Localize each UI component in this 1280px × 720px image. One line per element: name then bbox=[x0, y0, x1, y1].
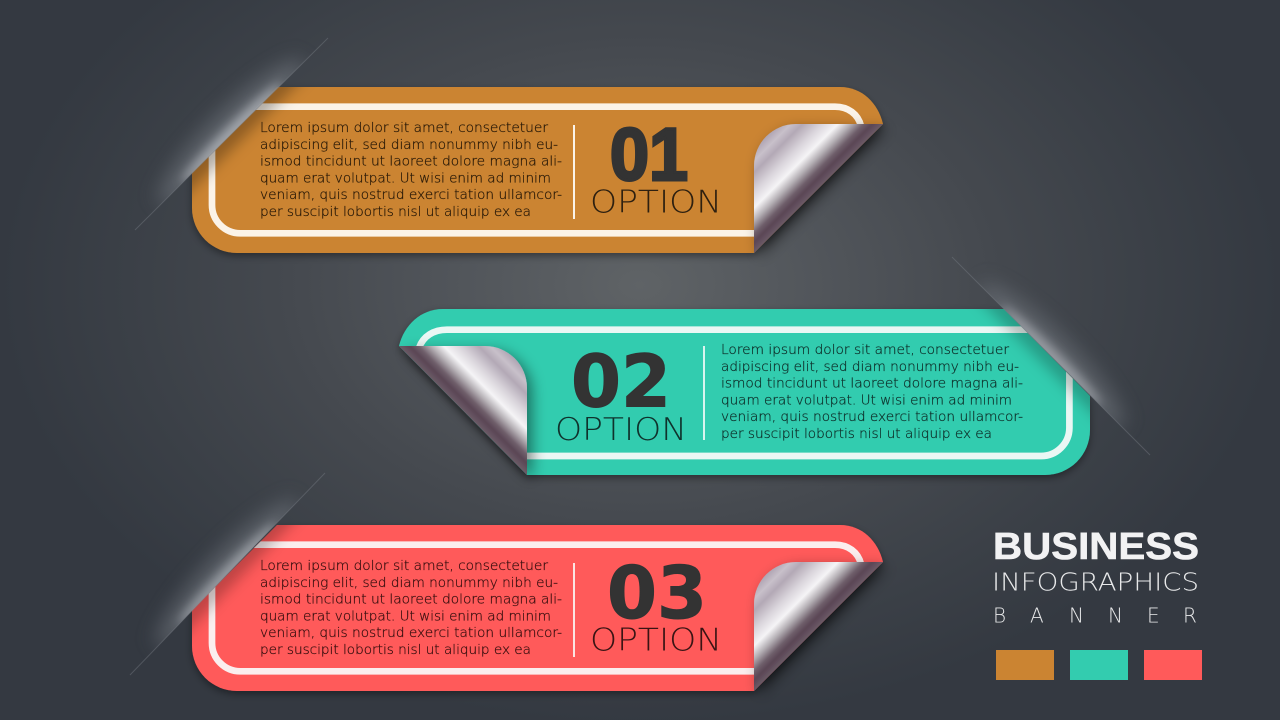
banner 1: orange bbox=[135, 38, 883, 253]
banner 2 body text: adipiscing elit, sed diam nonummy nibh eu- bbox=[721, 360, 1019, 375]
banner 3 option label: OPTION bbox=[590, 623, 722, 659]
banner 1 divider bbox=[573, 125, 575, 219]
banner 2 divider bbox=[703, 346, 705, 440]
banner 3 white frame line bbox=[212, 545, 861, 671]
title: business: BUSINESS bbox=[993, 526, 1199, 568]
banner 3 number: 03 bbox=[607, 551, 707, 635]
banner 3 body bbox=[192, 525, 883, 691]
banner 3 body text: adipiscing elit, sed diam nonummy nibh eu- bbox=[260, 576, 558, 591]
banner 3: red bbox=[130, 473, 883, 691]
banner 1 slit shadow bbox=[192, 87, 304, 199]
banner 2 body text: quam erat volutpat. Ut wisi enim ad minim bbox=[721, 393, 1012, 408]
banner 3 body text: ismod tincidunt ut laoreet dolore magna ali- bbox=[260, 592, 562, 608]
banner 2 body text: veniam, quis nostrud exerci tation ullamcor- bbox=[721, 410, 1023, 425]
banner 1 body text: Lorem ipsum dolor sit amet, consectetuer bbox=[260, 121, 549, 136]
banner 3 page curl bbox=[754, 562, 883, 691]
banner 1 body text: ismod tincidunt ut laoreet dolore magna ali- bbox=[260, 154, 562, 170]
banner 3 body text: quam erat volutpat. Ut wisi enim ad minim bbox=[260, 609, 551, 624]
swatch: teal bbox=[1070, 650, 1128, 680]
banner 3 slit highlight bbox=[130, 473, 325, 675]
banner 2 white frame line bbox=[419, 330, 1069, 456]
banner 2 body text: ismod tincidunt ut laoreet dolore magna ali- bbox=[721, 376, 1023, 392]
swatch: red bbox=[1144, 650, 1202, 680]
banner 1 body text: veniam, quis nostrud exerci tation ullamcor- bbox=[260, 188, 562, 203]
banner 2 body text bbox=[721, 343, 1023, 442]
banner 2 number: 02 bbox=[571, 340, 671, 424]
banner 1 body text bbox=[260, 121, 562, 220]
banner 1 body bbox=[192, 87, 883, 253]
banner 1 body text: per suscipit lobortis nisl ut aliquip ex ea bbox=[260, 205, 531, 220]
banner 1 white frame line bbox=[212, 107, 861, 233]
banner 3 body text: per suscipit lobortis nisl ut aliquip ex ea bbox=[260, 643, 531, 658]
banner 2 body bbox=[399, 309, 1090, 475]
title block bbox=[992, 526, 1199, 628]
banner 3 body text bbox=[260, 559, 562, 658]
banner 1 body text: quam erat volutpat. Ut wisi enim ad minim bbox=[260, 171, 551, 186]
banner 3 body text: veniam, quis nostrud exerci tation ullamcor- bbox=[260, 626, 562, 641]
banner 2 slit highlight bbox=[952, 257, 1150, 455]
colour legend bbox=[996, 650, 1202, 680]
banner 2 slit shadow bbox=[980, 309, 1090, 419]
banner 2 body text: per suscipit lobortis nisl ut aliquip ex ea bbox=[721, 427, 992, 442]
banner 2 page curl bbox=[399, 346, 527, 475]
banner 3 slit shadow bbox=[192, 525, 300, 638]
banner 3 divider bbox=[573, 563, 575, 657]
banner 1 number: 01 bbox=[610, 113, 688, 196]
banner 2 body text: Lorem ipsum dolor sit amet, consectetuer bbox=[721, 343, 1010, 358]
banner 1 slit highlight bbox=[135, 38, 328, 230]
banner 1 page curl bbox=[754, 124, 883, 253]
banner 1 body text: adipiscing elit, sed diam nonummy nibh eu- bbox=[260, 138, 558, 153]
banner 1 option label: OPTION bbox=[590, 185, 722, 221]
title: banner: BANNER bbox=[993, 604, 1197, 628]
banner 3 body text: Lorem ipsum dolor sit amet, consectetuer bbox=[260, 559, 549, 574]
banner 2: teal bbox=[399, 257, 1150, 475]
banner 2 option label: OPTION bbox=[555, 412, 687, 448]
swatch: orange bbox=[996, 650, 1054, 680]
title: infographics: INFOGRAPHICS bbox=[992, 568, 1199, 597]
